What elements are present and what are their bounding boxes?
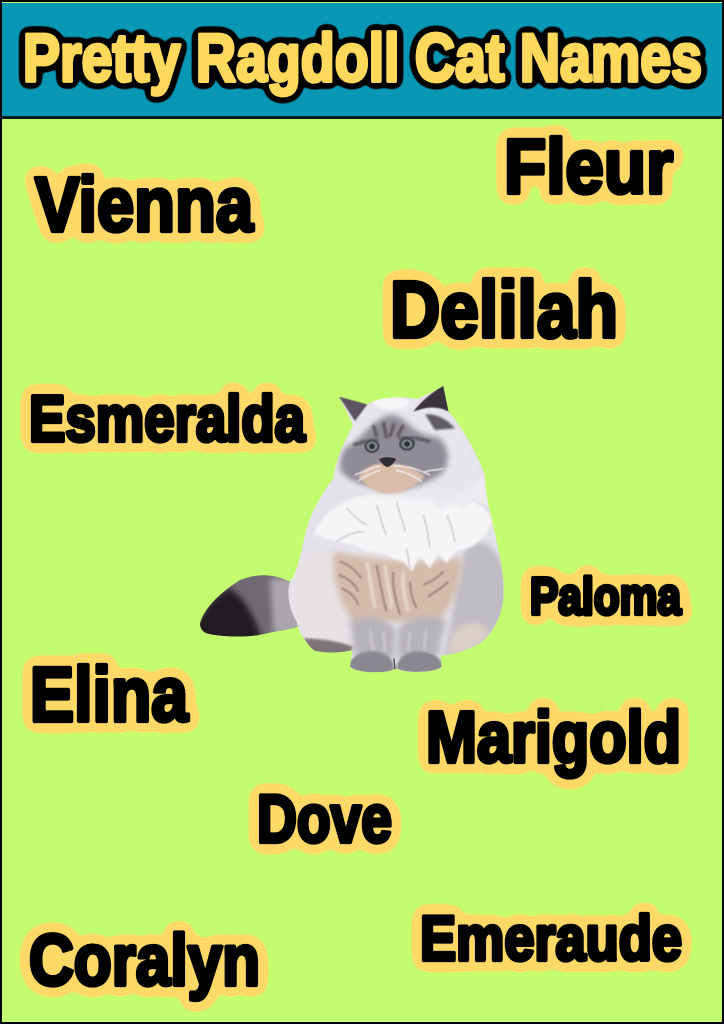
name: Fleur: Fleur [504, 124, 673, 210]
cat face mask [340, 415, 448, 490]
cat muzzle [358, 464, 425, 493]
cat brow shadow [353, 438, 430, 445]
name: Delilah: Delilah [390, 265, 618, 354]
cat tail [200, 575, 298, 636]
name: Dove: Dove [257, 781, 392, 857]
cat front legs [350, 617, 447, 658]
name: Paloma: Paloma [530, 568, 682, 626]
name: Coralyn: Coralyn [29, 921, 260, 1001]
cat right flank shade [442, 540, 504, 656]
illustration: ragdoll cat [193, 382, 510, 675]
cat ruff fur lines [337, 502, 455, 568]
name: Esmeralda: Esmeralda [29, 382, 306, 455]
cat base fur [283, 382, 510, 675]
cat shoulder locks [436, 478, 488, 509]
cat white chest ruff [313, 492, 492, 572]
cat eyes [364, 437, 415, 453]
cat left ear [339, 397, 367, 421]
cat nose [379, 457, 396, 467]
name: Marigold: Marigold [426, 698, 681, 778]
name: Vienna: Vienna [35, 162, 254, 248]
name: Emeraude: Emeraude [420, 904, 682, 974]
cat head side marking [425, 414, 455, 430]
cat body and head, clipped to silhouette [283, 382, 510, 675]
cat left flank [290, 558, 302, 634]
cat belly streaks [338, 562, 448, 615]
cat forehead white patch [372, 397, 410, 410]
name: Elina: Elina [30, 652, 189, 738]
cat right ear [413, 384, 452, 413]
cat head fur [334, 397, 444, 498]
cat forehead stripes [373, 422, 403, 438]
cat whiskers [355, 466, 443, 482]
cat tan belly [334, 552, 462, 622]
header banner [2, 3, 722, 117]
cat paws [347, 651, 443, 674]
